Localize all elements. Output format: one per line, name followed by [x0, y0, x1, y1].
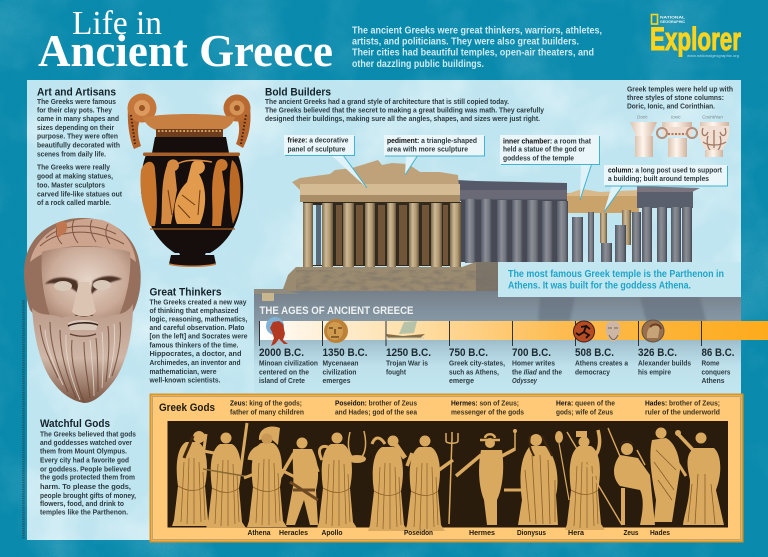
Parthenon temple [254, 160, 741, 300]
text block: gods: and goddesses watched over [40, 438, 132, 447]
entry: 700 B.C.: the Iliad and the [512, 368, 562, 376]
figure: zeus seated [608, 428, 655, 525]
frieze of gods [168, 421, 728, 531]
entry: 86 B.C.: conquers [702, 368, 730, 376]
icon: gold mask [324, 319, 348, 343]
entry: 1350 B.C.: 1350 B.C. [322, 347, 368, 359]
capital: ionic: Ionic [671, 114, 681, 120]
callout: pediment: area with more sculpture [387, 146, 468, 154]
figure: dionysus [504, 431, 569, 525]
caption: hera: Hera: queen of the [556, 400, 615, 408]
text block: column styles: three styles of stone columns: [627, 93, 724, 102]
text block: thinkers: The Greeks created a new way [150, 298, 246, 306]
text block: thinkers [149, 298, 248, 384]
vase foot [169, 250, 216, 266]
entry: 750 B.C.: emerge [449, 376, 474, 385]
vase handles [128, 94, 251, 149]
figure: apollo with lyre [317, 431, 366, 528]
figure: hermes [456, 429, 517, 525]
text block: art: too. Master sculptors [37, 180, 105, 190]
text block: thinkers: Archimedes, an inventor and [150, 358, 240, 367]
vase neck and lip [143, 114, 235, 130]
text block: thinkers: of thinking that emphasized [150, 306, 238, 315]
intro text: Their cities had beautiful temples, open-air theaters, and [352, 48, 594, 58]
text block: thinkers: and careful observation. Plato [150, 323, 245, 332]
entry: 750 B.C.: such as Athens, [449, 368, 499, 376]
hair and head [24, 218, 141, 330]
entry: 1350 B.C.: civilization [322, 368, 356, 376]
figure names: Poseidon [404, 530, 433, 537]
caption: hades [645, 400, 720, 416]
callout: pediment [384, 135, 485, 175]
timeline backdrop [254, 289, 741, 394]
entry: 2000 B.C.: 2000 B.C. [259, 347, 304, 359]
text block: art: scenes from daily life. [37, 150, 106, 158]
text block: thinkers: mathematician, were [150, 367, 216, 376]
callout: inner chamber: inner chamber: a room that [503, 138, 592, 146]
text block: art: The Greeks were famous [37, 97, 116, 106]
brow, eyes, nose, mouth [45, 276, 122, 296]
caption: hermes: Hermes: son of Zeus; [451, 400, 519, 408]
text block: gods: Every city had a favorite god [40, 456, 129, 464]
vase body [141, 155, 243, 253]
entry: 700 B.C.: Odyssey [512, 376, 538, 385]
callout: inner chamber: goddess of the temple [503, 156, 574, 162]
figure names: Hades [650, 530, 670, 537]
icon: red runner circle [574, 321, 594, 342]
entry: 1250 B.C.: fought [386, 368, 407, 376]
entry: 508 B.C. [575, 347, 629, 376]
title: Ancient Greece [38, 25, 333, 76]
entry: 86 B.C.: 86 B.C. [702, 347, 734, 359]
callout: parthenon note: The most famous Greek temple is the Parthenon in [508, 269, 724, 280]
heading: greek gods: Greek Gods [159, 402, 215, 414]
callout: frieze [284, 135, 367, 188]
text block: gods: the gods protected them from [40, 472, 135, 482]
gods panel frame [150, 394, 742, 542]
timeline band [259, 321, 768, 340]
callout: pediment: pediment: a triangle-shaped [387, 138, 477, 145]
panel: greek gods [150, 394, 742, 542]
callout: column [604, 165, 728, 212]
text block: art: sizes depending on their [37, 123, 114, 132]
text block: thinkers: [on the left] and Socrates were [150, 332, 248, 340]
text block: art: good at making statues, [37, 172, 113, 180]
margin fine print [22, 300, 25, 539]
text block: column styles: Greek temples were held up with [627, 84, 733, 94]
entry: 86 B.C.: Athens [702, 376, 724, 385]
bust of Plato [24, 218, 141, 403]
figure names: Hermes [469, 530, 495, 537]
text block: thinkers: famous thinkers of the time. [150, 340, 238, 350]
entry: 1350 B.C.: Mycenaean [322, 358, 358, 368]
callout: inner chamber: held a statue of the god or [503, 146, 585, 154]
panel: watchful gods [40, 418, 136, 516]
entry: 750 B.C.: Greek city-states, [449, 358, 505, 368]
panel: bold builders text [265, 86, 544, 123]
temple north colonnade [457, 180, 568, 263]
temple pediment and front [292, 160, 461, 268]
caption: poseidon: and Hades; god of the sea [335, 410, 417, 416]
text block: thinkers: logic, reasoning, mathematics, [150, 314, 248, 324]
timeline entries [259, 347, 734, 385]
logo: National Geographic Explorer [650, 14, 741, 58]
caption: zeus [230, 400, 304, 416]
text block: art: The Greeks were really [37, 162, 110, 172]
figure names: Apollo [322, 530, 342, 537]
entry: 700 B.C.: 700 B.C. [512, 347, 551, 359]
icon: minoan figure [266, 317, 288, 346]
timeline heading: THE AGES OF ANCIENT GREECE [260, 305, 414, 317]
intro text: artists, and politicians. They were also great builders. [352, 36, 579, 48]
text block: art: of a rock called marble. [37, 198, 111, 207]
figure names [248, 530, 670, 537]
figure: hades [650, 428, 686, 522]
callout: parthenon note [498, 262, 741, 297]
vase red figures [140, 159, 240, 226]
figure: zeus-side attendant [172, 431, 225, 526]
text block: art: purpose. They were often [37, 132, 118, 140]
text block: gods: them from Mount Olympus. [40, 446, 127, 456]
panel: art and artisans text [37, 86, 123, 207]
icon: alexander coin [642, 320, 664, 342]
text block: gods: or goddess. People believed [40, 464, 131, 474]
caption: poseidon: Poseidon: brother of Zeus [335, 400, 417, 408]
figure names: Dionysus [517, 530, 546, 537]
figure names: Heracles [279, 530, 308, 537]
text block: column styles [627, 84, 733, 110]
callout: parthenon note: Athens. It was built for the goddess Athena. [508, 280, 691, 292]
figure: athena [244, 426, 295, 527]
callout: frieze: frieze: a decorative [288, 138, 349, 144]
timeline ticks [260, 321, 702, 346]
temple base rocks [254, 262, 741, 300]
logo: National Geographic Explorer: NATIONAL [660, 16, 685, 20]
text block: builders: The Greeks believed that the secret to making a great building was math. They carefully [265, 106, 544, 114]
caption: hermes [451, 400, 524, 416]
figure: attendant with staff [203, 423, 250, 528]
caption: zeus: father of many children [230, 410, 304, 416]
entry: 1250 B.C.: 1250 B.C. [386, 347, 431, 359]
heading: great thinkers: Great Thinkers [150, 286, 222, 298]
icon: ship [386, 321, 425, 338]
text block: art: for their clay pots. They [37, 106, 112, 114]
caption: hades: Hades: brother of Zeus; [645, 400, 720, 408]
entry: 700 B.C.: Homer writes [512, 358, 555, 368]
entry: 86 B.C.: Rome [702, 358, 720, 368]
heading: bold builders: Bold Builders [265, 86, 331, 98]
text block: gods: The Greeks believed that gods [40, 430, 136, 438]
entry: 1350 B.C. [322, 347, 368, 385]
entry: 326 B.C.: 326 B.C. [638, 347, 677, 359]
entry: 750 B.C.: 750 B.C. [449, 347, 488, 359]
caption: hera [556, 400, 615, 416]
entry: 1250 B.C.: Trojan War is [386, 358, 428, 368]
figure: goddess [675, 430, 724, 525]
text block: gods: harm. To please the gods, [40, 482, 131, 491]
text block: column styles: Doric, Ionic, and Corinthian. [627, 102, 715, 110]
text block: art: came in many shapes and [37, 114, 119, 123]
entry: 750 B.C. [449, 347, 505, 385]
heading: art and artisans: Art and Artisans [37, 86, 116, 98]
heading: watchful gods: Watchful Gods [40, 418, 110, 430]
entry: 508 B.C.: democracy [575, 368, 610, 376]
entry: 326 B.C. [638, 347, 691, 376]
text block: gods: people brought gifts of money, [40, 491, 136, 500]
logo: National Geographic Explorer: www.nationalgeographic.org [687, 54, 739, 58]
text block: builders [265, 97, 544, 123]
figure names: Athena [248, 530, 271, 537]
callout: column: column: a long post used to support [608, 168, 723, 174]
main light panel [27, 80, 741, 540]
caption: hermes: messenger of the gods [451, 410, 524, 416]
icon: socrates bust [606, 322, 620, 342]
text block: art: beautifully decorated with [37, 140, 120, 150]
caption: hera: gods; wife of Zeus [556, 410, 613, 416]
logo: National Geographic Explorer: GEOGRAPHIC [660, 20, 686, 24]
entry: 86 B.C. [702, 347, 734, 385]
beard [32, 304, 133, 403]
figure: hera [565, 430, 622, 530]
caption: poseidon [335, 400, 417, 416]
panel: great thinkers [149, 286, 248, 384]
entry: 2000 B.C. [259, 347, 318, 385]
figure names: Zeus [624, 530, 639, 537]
capital: corinthian: Corinthian [702, 114, 723, 120]
figure: poseidon with trident [405, 432, 458, 531]
vase [128, 94, 251, 266]
figure: heracles [280, 438, 318, 525]
text block: thinkers: Hippocrates, a doctor, and [150, 349, 242, 358]
text block: builders: The ancient Greeks had a grand style of architecture that is still copied today. [265, 97, 509, 106]
intro text [352, 26, 602, 70]
callouts [284, 135, 728, 212]
entry: 508 B.C.: 508 B.C. [575, 347, 614, 359]
entry: 2000 B.C.: island of Crete [259, 376, 305, 385]
timeline [254, 289, 768, 394]
caption: hades: ruler of the underworld [645, 410, 720, 416]
text block: gods [40, 430, 136, 516]
face [42, 247, 130, 325]
intro text: other dazzling public buildings. [352, 59, 484, 70]
text block: gods: flowers, food, and drink to [40, 499, 125, 508]
text block: art [37, 97, 123, 207]
entry: 2000 B.C.: centered on the [259, 368, 309, 376]
callout: column: a building; built around temples [608, 176, 709, 183]
capital: doric: Doric [637, 114, 648, 120]
entry: 1350 B.C.: emerges [322, 376, 350, 385]
callout: inner chamber [500, 135, 600, 200]
column capitals [630, 114, 729, 157]
callout: frieze: panel of sculpture [288, 146, 346, 154]
caption: zeus: Zeus: king of the gods; [230, 400, 302, 408]
text block: gods: temples like the Parthenon. [40, 508, 128, 516]
intro text: The ancient Greeks were great thinkers, warriors, athletes, [352, 26, 602, 36]
title: Life in [72, 5, 162, 42]
entry: 326 B.C.: his empire [638, 368, 671, 376]
text block: art: carved life-like statues out [37, 190, 123, 198]
figure names: Hera [568, 530, 584, 537]
figure: sea god companion [368, 436, 408, 531]
text block: builders: designed their buildings, making sure all the angles, shapes, and sizes were just right. [265, 114, 540, 123]
text block: thinkers: well-known scientists. [149, 376, 220, 384]
temple back right [567, 186, 700, 262]
entry: 1250 B.C. [386, 347, 431, 376]
entry: 700 B.C. [512, 347, 562, 385]
entry: 2000 B.C.: Minoan civilization [259, 358, 318, 368]
entry: 326 B.C.: Alexander builds [638, 358, 691, 368]
entry: 508 B.C.: Athens creates a [575, 358, 629, 368]
